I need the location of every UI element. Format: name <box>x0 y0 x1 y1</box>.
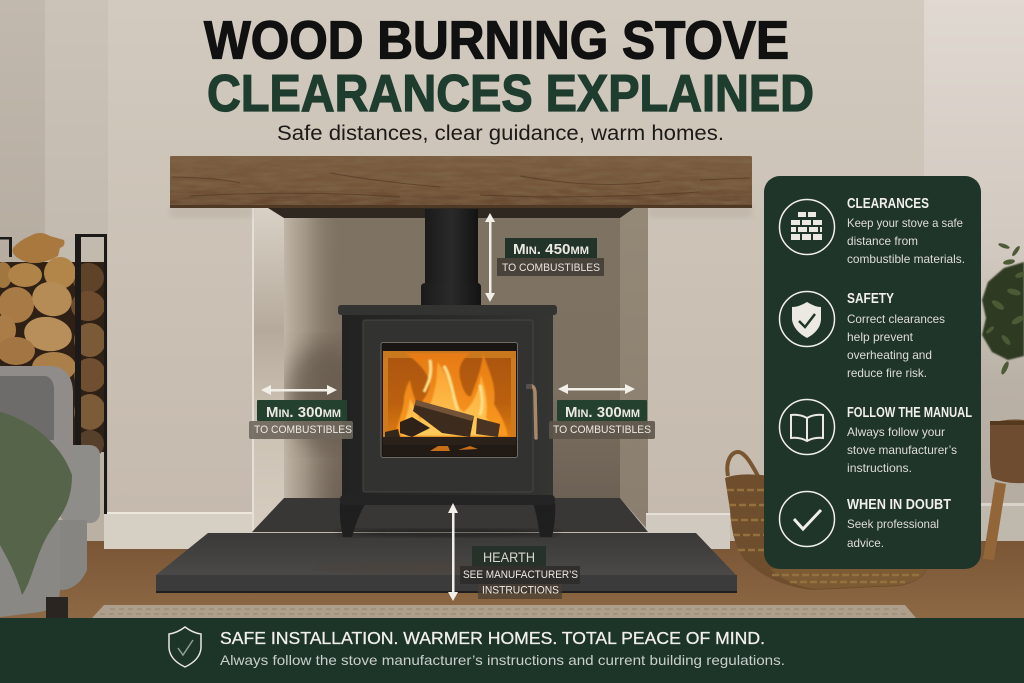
item: when in doubt: Seek professional <box>847 517 939 531</box>
left clearance: label <box>249 400 353 439</box>
icon: footer shield <box>169 627 201 667</box>
top clearance: label: Min. 450mm <box>513 241 589 258</box>
item: safety <box>780 291 945 380</box>
right side wall <box>924 0 1024 510</box>
hearth label: HEARTH <box>483 549 535 565</box>
icon: open book <box>780 400 834 454</box>
log store <box>0 233 107 514</box>
item: clearances <box>780 196 965 266</box>
item: when in doubt <box>780 492 951 550</box>
stove top plate <box>338 305 557 315</box>
item: follow the manual: instructions. <box>847 461 912 475</box>
floor <box>0 541 1024 620</box>
footer note: Always follow the stove manufacturer’s instructions and current building regulations. <box>220 652 785 668</box>
footer headline: SAFE INSTALLATION. WARMER HOMES. TOTAL PEACE OF MIND. <box>220 628 765 648</box>
oak mantel beam <box>170 156 752 208</box>
subtitle: Safe distances, clear guidance, warm homes. <box>277 121 724 145</box>
title line 2: CLEARANCES EXPLAINED <box>207 65 814 123</box>
chimney breast wall <box>108 0 924 550</box>
left side wall <box>0 0 108 560</box>
right clearance: label: TO COMBUSTIBLES <box>553 424 651 436</box>
skirting boards <box>104 503 1024 549</box>
item: follow the manual <box>780 400 972 475</box>
icon: shield with tick <box>780 292 834 346</box>
mantel shadow <box>170 206 752 218</box>
item: safety: help prevent <box>847 330 914 344</box>
stove base plate <box>340 495 555 505</box>
hearth label <box>460 546 580 599</box>
right clearance: arrow <box>558 384 635 394</box>
item: clearances: distance from <box>847 234 918 248</box>
stove body <box>342 313 553 498</box>
door handle <box>526 384 536 438</box>
item: when in doubt: WHEN IN DOUBT <box>847 497 951 513</box>
stove window <box>381 342 518 458</box>
potted plant <box>982 242 1024 375</box>
title <box>204 10 814 145</box>
stove legs <box>340 503 555 537</box>
item: follow the manual: Always follow your <box>847 425 945 439</box>
stacked logs <box>0 233 106 458</box>
stove shadow on hearth <box>336 529 560 537</box>
top clearance: label: TO COMBUSTIBLES <box>502 262 600 274</box>
wicker basket <box>725 452 927 590</box>
grey sofa <box>0 366 100 618</box>
icon: brick wall <box>780 200 834 254</box>
grate <box>383 437 516 456</box>
item: clearances: Keep your stove a safe <box>847 216 963 230</box>
right clearance: label <box>549 400 655 439</box>
top clearance: label <box>497 238 604 276</box>
item: clearances: combustible materials. <box>847 252 965 266</box>
hearth <box>156 498 737 593</box>
item: safety: SAFETY <box>847 291 894 307</box>
item: follow the manual: FOLLOW THE MANUAL <box>847 405 972 421</box>
flue pipe <box>421 209 481 305</box>
wood burning stove <box>338 305 557 537</box>
item: safety: overheating and <box>847 348 932 362</box>
log rack frame <box>0 234 107 514</box>
left clearance: label: Min. 300mm <box>266 404 341 421</box>
panel: guidance sidebar <box>764 176 981 569</box>
fireplace recess <box>252 208 648 532</box>
item: when in doubt: advice. <box>847 536 884 550</box>
item: clearances: CLEARANCES <box>847 196 929 212</box>
footer banner <box>0 618 1024 683</box>
hearth label: SEE MANUFACTURER’S <box>463 569 578 581</box>
rug <box>92 605 916 618</box>
left clearance: arrow <box>261 385 337 395</box>
left clearance: label: TO COMBUSTIBLES <box>254 424 352 436</box>
top clearance: arrow <box>485 213 495 302</box>
logs <box>385 400 500 437</box>
title line 1: WOOD BURNING STOVE <box>204 10 789 70</box>
green throw blanket <box>0 412 72 595</box>
item: safety: Correct clearances <box>847 312 945 326</box>
right clearance: label: Min. 300mm <box>565 404 640 421</box>
hearth label: INSTRUCTIONS <box>482 584 559 596</box>
hearth arrow <box>448 503 458 601</box>
icon: check mark <box>780 492 834 546</box>
item: follow the manual: stove manufacturer’s <box>847 443 957 457</box>
wooden plant stand <box>983 420 1024 560</box>
item: safety: reduce fire risk. <box>847 366 927 380</box>
stove door <box>363 320 533 492</box>
flames <box>395 352 508 436</box>
